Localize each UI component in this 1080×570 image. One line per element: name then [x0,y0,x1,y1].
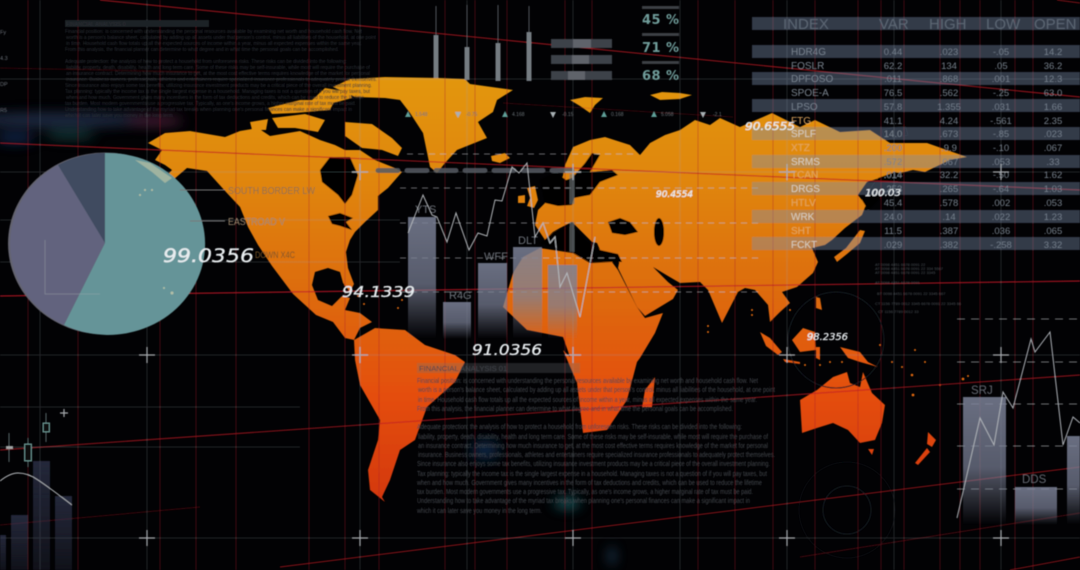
Iceland, Britain, Svalbard and Arctic dots [491,153,510,163]
left edge labels: DP [0,82,8,88]
right line chart [957,332,1080,518]
table values: 0.44 [884,47,902,58]
right bar chart: DDS [1022,474,1047,486]
callout labels: EASTROAD V [228,217,285,228]
table values: 32.2 [940,170,958,181]
value: 99.0356: 99.0356 [163,245,254,267]
New Zealand [927,432,936,447]
pie chart [8,152,205,335]
lower center text block: Understanding how to take advantage of the myriad tax breaks when planning one's personal finances can make a significant impact in [417,496,750,505]
lower center text block: Financial position: is concerned with understanding the personal resources available by examining net worth and household cash flow. Net [417,376,759,385]
center bar chart: DLT [518,235,538,247]
table values: 14.2 [1044,47,1062,58]
slice: purple [10,165,105,325]
table values: .14 [942,212,956,223]
upper left text block: which it can later save you money in the long term. [64,113,174,119]
table values: 14.0 [884,129,902,140]
inland seas [320,125,908,262]
table values: 1.66 [1044,102,1062,113]
percentage readouts [642,6,679,84]
table values: .002 [992,198,1010,209]
left edge labels [0,30,8,114]
table header: LOW [986,16,1021,33]
table values: -.50 [993,170,1009,181]
left edge labels: Fy [0,30,6,36]
table labels: SPLF [791,129,816,140]
small code text [875,262,962,314]
thick dashed bar [378,168,575,173]
upper left text block [64,20,377,119]
North America [148,128,402,340]
slice: dark [58,153,105,243]
table labels: FCKT [791,240,817,251]
table labels: FOSLR [791,61,824,72]
upper left text block: Financial position: is concerned with understanding the personal resources available by examining net worth and household cash flow. Net [65,29,362,35]
table values: .562 [940,88,958,99]
data table [752,16,1080,251]
table values: .387 [940,226,958,237]
center bar chart: WFF [484,251,508,263]
Greenland [333,77,513,173]
table labels: TCAN [791,170,818,181]
bottom left chart [0,413,72,570]
ticker row: -0.75 [466,112,478,118]
top progress bars [551,39,612,80]
table labels: SHT [791,226,811,237]
lower center text block: Since insurance also enjoys some tax benefits, utilizing insurance investment products may be a critical piece of the overall investment planning. [417,459,770,468]
Australia [800,372,885,443]
small code text: CT 1156 7789 0012 3345 6678 0091 22 3345 66 [875,301,962,306]
table values: 63.0 [1044,88,1062,99]
table labels [791,47,833,251]
ticker row: 1.548 [415,112,428,118]
upper left text block: tax burden. Most modern governments use a progressive tax. Typically, as one's income grows, a higher marginal rate of tax must be paid. [65,101,356,107]
table values: .05 [994,61,1008,72]
table values: .9.9 [941,143,957,154]
upper left text block: when and how much. Government gives many incentives in the form of tax deductions and credits, which can be used to reduce the lifetime [65,95,364,101]
center dashed level lines [400,154,760,292]
table values: .022 [992,212,1010,223]
table values: 11.5 [884,226,902,237]
left edge labels: 4.3 [0,56,8,62]
radar rings [788,292,895,558]
table header: HIGH [929,16,966,33]
Eurasia [535,113,967,323]
table values: .023 [1044,129,1062,140]
upper left text block: Adequate protection: the analysis of how to protect a household from unforeseen risks. These risks can be divided into the following: [65,59,347,65]
center bar chart: YTS [415,204,436,216]
table values: 1.23 [1044,212,1062,223]
callout labels: SOUTH BORDER LW [228,186,315,197]
table labels: HTLV [791,198,816,209]
table values: 76.5 [884,88,902,99]
ticker row: 4.168 [512,112,525,118]
value: 100.03: 100.03 [865,188,901,199]
table values: .067 [940,157,958,168]
slice: teal majority [64,153,205,335]
percentage readouts: 45 % [642,13,679,28]
lower center text block: when and how much. Government gives many incentives in the form of tax deductions and credits, which can be used to reduce the lifetime [416,478,762,487]
table labels: FTG [791,116,811,127]
table values: .029 [884,240,902,251]
upper left text block: insurance. Business owners, professionals, athletes and entertainers require specialized insurance professionals to adequately protect themselves. [66,77,377,83]
table values: .011 [884,74,902,85]
lower center text block: insurance. Business owners, professionals, athletes and entertainers require specialized insurance professionals to adequately protect themselves. [418,450,775,459]
table header: VAR [879,16,909,33]
table values: 62.2 [884,61,902,72]
ticker row: 5.058 [661,112,674,118]
table labels: DRGS [791,184,820,195]
table values: 36.2 [1044,61,1062,72]
table values: .001 [992,74,1010,85]
table values: .572 [884,157,902,168]
table values: -.05 [993,47,1009,58]
table labels: SPOE-A [791,88,829,99]
table values: -.85 [993,129,1009,140]
table values: .053 [1044,198,1062,209]
upper left text block: FINANCIAL ANALYSIS 0 [66,22,126,28]
lower center text block: an insurance contract. Determining how much insurance to get, at the most cost effective terms requires knowledge of the market for personal [418,441,768,450]
value: 94.1339: 94.1339 [342,283,415,301]
value: 98.2356: 98.2356 [807,332,848,343]
table labels: LPSO [791,102,818,113]
callout labels [180,186,315,260]
Southeast Asia islands [760,332,782,355]
table header [783,16,1077,33]
ticker row: -2.1 [713,112,722,118]
table values: 2.35 [1044,116,1062,127]
table values: 1.62 [1044,170,1062,181]
table header: OPEN [1034,16,1077,33]
small code text: AT 0098 4451 6678 0091 [875,280,921,285]
table values [884,47,1062,251]
table values: -.561 [990,116,1012,127]
upper left text block: From this analysis, the financial planner can determine to what degree and in what time the personal goals can be accomplished. [65,47,339,53]
table header: INDEX [783,16,829,33]
lower center text block: Adequate protection: the analysis of how to protect a household from unforeseen risks. These risks can be divided into the following: [417,422,742,431]
table values: .253 [884,184,902,195]
table labels: HDR4G [791,47,826,58]
small code text: AT 0098 4451 6678 0091 22 [875,262,926,267]
center bar chart: R4G [449,290,472,302]
right bar chart [957,319,1080,525]
Madagascar [642,377,655,407]
lower center text block: tax burden. Most modern governments use a progressive tax. Typically, as one's income grows, a higher marginal rate of tax must be paid. [417,487,753,496]
table labels: XTZ [791,143,810,154]
upper left text block: in time. Household cash flow totals up all the expected sources of income within a year, minus all expected expenses within the same year. [66,41,362,47]
table values: .382 [940,240,958,251]
small code text: CT 1156 7789 0012 33 [878,309,919,314]
value: 90.4554: 90.4554 [656,190,693,200]
percentage readouts: 71 % [642,41,679,56]
table values: 24.0 [884,212,902,223]
callout labels: DOWN X4C [255,250,295,260]
table values: -.258 [990,240,1012,251]
table row bars [752,17,1080,250]
Japan [834,230,865,262]
table values: 45.4 [884,198,902,209]
upper left text block: worth is a person's balance sheet, calculated by adding up all assets under that person's control, minus all liabilities of the household, at one point [65,35,376,41]
table values: -.64 [993,184,1009,195]
upper left text block: Since insurance also enjoys some tax benefits, utilizing insurance investment products may be a critical piece of the overall investment planning. [65,83,372,89]
table labels: WRK [791,212,815,223]
ticker row: 0.168 [611,112,624,118]
lower center text block: FINANCIAL ANALYSIS 01 [419,364,507,373]
table values: .578 [940,198,958,209]
table values: .053 [992,157,1010,168]
table labels: SRMS [791,157,820,168]
small code text: AT 0098 4451 6678 0091 22 3345 [875,270,936,275]
South America [354,328,465,502]
table values: .33 [1046,157,1060,168]
table values: .200 [884,143,902,154]
table values: .036 [992,226,1010,237]
upper left text block: liability, property, death, disability, health and long term care. Some of these risks may be self-insurable, while most will require the purchase of [66,65,370,71]
lower center text block: From this analysis, the financial planner can determine to what degree and in what time the personal goals can be accomplished. [417,404,733,413]
table values: 1.355 [937,102,961,113]
percentage readouts: 68 % [642,69,679,84]
ticker row [405,111,722,118]
lower center text block [416,363,776,515]
archipelago dots [344,284,969,396]
table values: 12.3 [1044,74,1062,85]
upper left text block: Understanding how to take advantage of the myriad tax breaks when planning one's personal finances can make a significant impact in [65,107,352,113]
table values: .067 [1044,143,1062,154]
upper left text block: an insurance contract. Determining how much insurance to get, at the most cost effective terms requires knowledge of the market for personal [66,71,370,77]
lower center text block: liability, property, death, disability, health and long term care. Some of these risks may be self-insurable, while most will require the purchase of [418,432,769,441]
value: 90.6555: 90.6555 [745,120,795,133]
ticker row: -0.15 [562,112,574,118]
table values: .265 [940,184,958,195]
center vertical marker [570,174,574,260]
upper left text block: Tax planning: typically the income tax is the single largest expense in a household. Managing taxes is not a question of if you will pay taxes, but [65,89,370,95]
table values: 57.8 [884,102,902,113]
table values: 41.1 [884,116,902,127]
Africa [503,248,663,433]
lower center text block: which it can later save you money in the long term. [416,506,542,515]
lower center text block: Tax planning: typically the income tax is the single largest expense in a household. Managing taxes is not a question of if you will pay taxes, but [417,469,768,478]
table values: -.25 [993,88,1009,99]
center line chart [408,163,595,317]
left edge labels: R5 [0,108,7,114]
center bar chart [408,204,577,339]
small code text: BT 0098 4451 6678 0091 22 3345 667 [877,291,946,296]
lower center text block: worth is a person's balance sheet, calculated by adding up all assets under that person's control, minus all liabilities of the household, at one point [417,385,776,394]
table values: .673 [940,129,958,140]
Arctic islands [250,119,268,130]
table values: .868 [940,74,958,85]
crosshair markers [60,164,1009,546]
table values: 1.03 [1044,184,1062,195]
table labels: DPFOSO [791,74,833,85]
top candlestick chart [434,5,532,81]
small code text: AT 0098 4451 6678 0091 22 334 5567 [875,266,944,271]
lower center text block: in time. Household cash flow totals up all the expected sources of income within a year, minus all expected expenses within the same year. [418,395,757,404]
lens glow streaks [0,113,614,565]
table values: 134 [941,61,957,72]
table values: .065 [1044,226,1062,237]
right bar chart: SRJ [971,385,993,397]
table values: 4.24 [940,116,958,127]
table values: -.10 [993,143,1009,154]
table values: 3.32 [1044,240,1062,251]
table values: .023 [940,47,958,58]
value: 91.0356: 91.0356 [472,341,542,359]
world map [148,77,967,502]
table values: .014 [884,170,902,181]
table values: .031 [992,102,1010,113]
